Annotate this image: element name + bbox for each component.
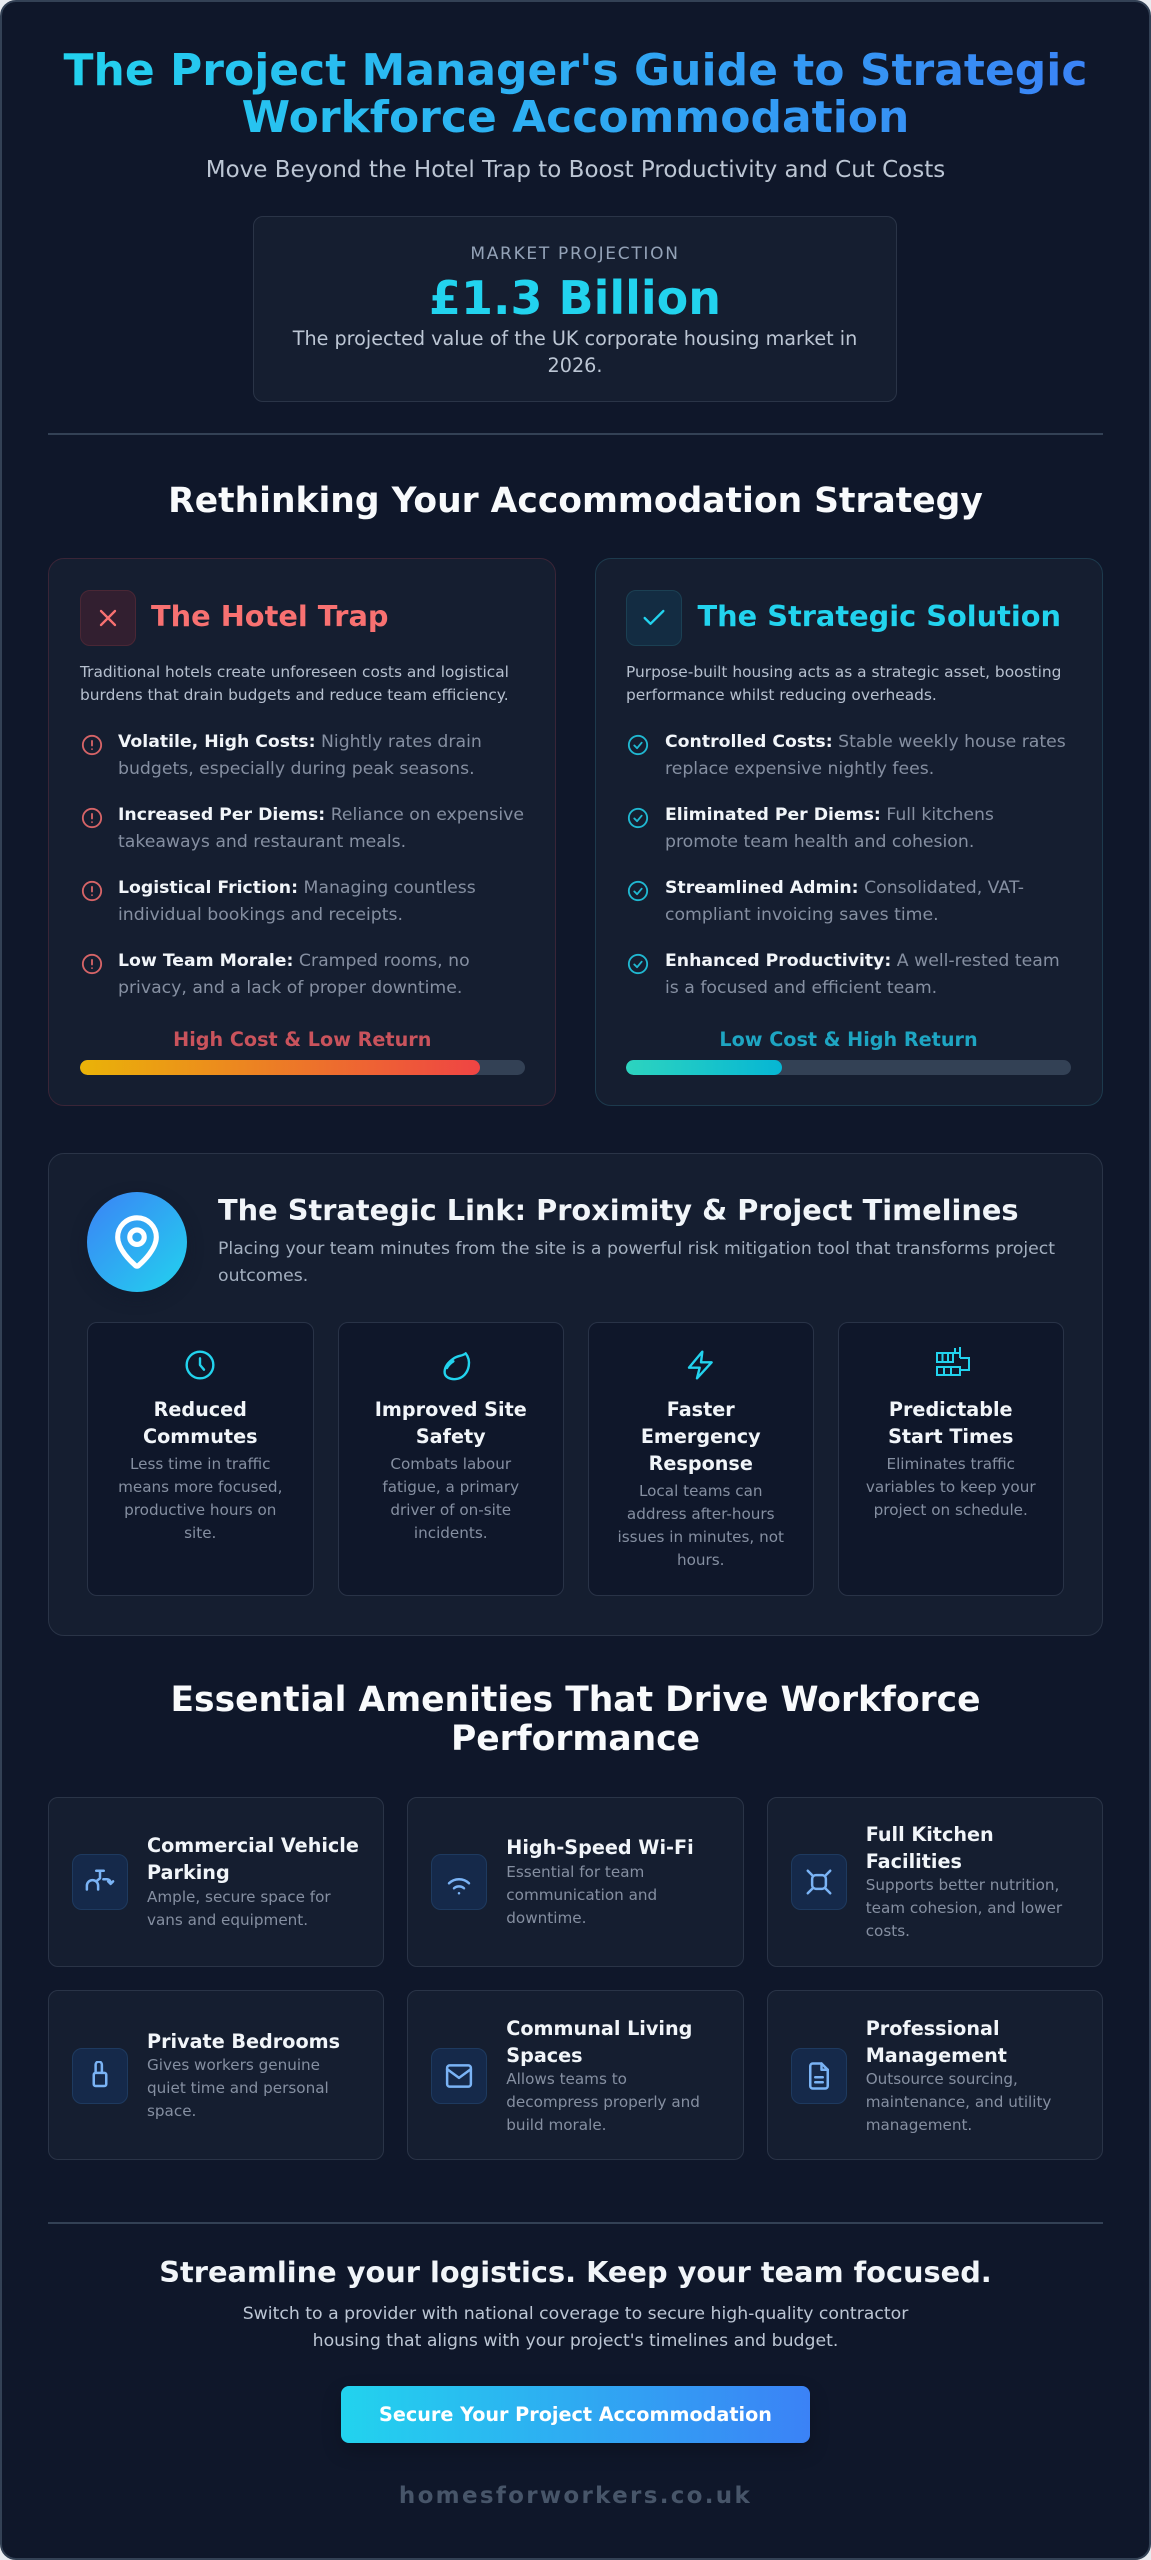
icon: check circle bbox=[628, 734, 648, 756]
card title: Commercial Vehicle bbox=[147, 1834, 359, 1857]
card title: Faster bbox=[667, 1398, 735, 1420]
item: eliminated per diems: promote team health and cohesion. bbox=[665, 832, 974, 852]
card title: High-Speed Wi-Fi bbox=[506, 1836, 694, 1859]
item: streamlined admin: Streamlined Admin: Consolidated, VAT- bbox=[665, 878, 1024, 898]
heading: essential amenities bbox=[170, 1680, 981, 1758]
item: increased per diems bbox=[118, 805, 524, 852]
card text: communication and bbox=[506, 1886, 657, 1904]
item: enhanced productivity bbox=[665, 951, 1060, 998]
card text bbox=[866, 1455, 1036, 1519]
icon: parking bbox=[72, 1854, 128, 1910]
card title: Reduced bbox=[154, 1398, 247, 1420]
card text: downtime. bbox=[506, 1908, 586, 1926]
card text: driver of on-site bbox=[390, 1501, 511, 1519]
panel heading: The Strategic Solution bbox=[698, 599, 1061, 633]
section description: outcomes. bbox=[218, 1266, 308, 1286]
item: streamlined admin bbox=[665, 878, 1024, 925]
card text: Outsource sourcing, bbox=[866, 2070, 1018, 2088]
card title bbox=[888, 1398, 1013, 1448]
card text: Allows teams to bbox=[506, 2070, 627, 2088]
card: faster emergency response bbox=[588, 1322, 814, 1596]
card title: Start Times bbox=[888, 1424, 1013, 1448]
card title: Private Bedrooms bbox=[147, 2030, 340, 2053]
item: low team morale: privacy, and a lack of proper downtime. bbox=[118, 978, 462, 998]
icon: check circle bbox=[628, 880, 648, 902]
item: volatile high costs: budgets, especially during peak seasons. bbox=[118, 759, 475, 779]
card text: team cohesion, and lower bbox=[866, 1899, 1062, 1917]
stat label: MARKET PROJECTION bbox=[470, 244, 680, 264]
icon: alert bbox=[82, 954, 102, 974]
panel: the strategic link bbox=[48, 1153, 1103, 1636]
card title: Professional bbox=[866, 2017, 1000, 2040]
icon: map pin bbox=[87, 1192, 187, 1292]
card text: build morale. bbox=[506, 2116, 606, 2134]
card title: Response bbox=[649, 1452, 753, 1474]
card text: maintenance, and utility bbox=[866, 2092, 1051, 2110]
item: streamlined admin: compliant invoicing saves time. bbox=[665, 905, 939, 925]
card title bbox=[506, 2017, 692, 2067]
panel: market projection stat bbox=[253, 216, 897, 402]
icon: schedule blocks bbox=[936, 1347, 970, 1376]
item: volatile high costs bbox=[118, 732, 482, 779]
card text: Local teams can bbox=[639, 1482, 763, 1500]
item: eliminated per diems: Eliminated Per Diems: Full kitchens bbox=[665, 805, 994, 825]
footer text bbox=[48, 2300, 1103, 2354]
card text bbox=[118, 1455, 282, 1542]
brand: homesforworkers.co.uk bbox=[399, 2483, 752, 2509]
card text: vans and equipment. bbox=[147, 1910, 308, 1928]
meter: high cost bar bbox=[80, 1060, 524, 1074]
card text: fatigue, a primary bbox=[382, 1478, 519, 1496]
card text: means more focused, bbox=[118, 1478, 282, 1496]
card text bbox=[866, 1876, 1062, 1940]
footer text: housing that aligns with your project's timelines and budget. bbox=[313, 2330, 838, 2350]
card title: Improved Site bbox=[375, 1398, 527, 1420]
card text: costs. bbox=[866, 1922, 910, 1940]
panel intro: Purpose-built housing acts as a strategic asset, boosting bbox=[626, 662, 1061, 680]
icon: bedroom bbox=[72, 2048, 128, 2104]
icon: check circle bbox=[628, 954, 648, 974]
heading: essential amenities: Essential Amenities That Drive Workforce bbox=[170, 1680, 981, 1720]
card text: Combats labour bbox=[390, 1455, 511, 1473]
card title bbox=[641, 1398, 761, 1474]
icon: clock bbox=[186, 1350, 214, 1380]
button: call to action bbox=[341, 2386, 810, 2443]
meter: low cost bar bbox=[626, 1060, 1071, 1074]
card text bbox=[506, 1862, 657, 1926]
card: private bedrooms bbox=[48, 1990, 384, 2160]
card text: incidents. bbox=[414, 1524, 488, 1542]
card text: management. bbox=[866, 2116, 972, 2134]
card text: issues in minutes, not bbox=[618, 1528, 784, 1546]
stat description: The projected value of the UK corporate housing market in bbox=[293, 327, 857, 350]
card text: Ample, secure space for bbox=[147, 1888, 331, 1906]
title: The Project Manager's Guide to Strategic bbox=[64, 45, 1087, 96]
card title: Commutes bbox=[143, 1424, 258, 1448]
title: Workforce Accommodation bbox=[242, 92, 909, 142]
heading: rethinking strategy: Rethinking Your Accommodation Strategy bbox=[168, 481, 983, 521]
item: volatile high costs: Volatile, High Costs: Nightly rates drain bbox=[118, 732, 482, 752]
card text: site. bbox=[184, 1524, 216, 1542]
card text: Less time in traffic bbox=[130, 1455, 271, 1473]
card text: Eliminates traffic bbox=[886, 1455, 1015, 1473]
card text: quiet time and personal bbox=[147, 2079, 329, 2097]
card: full kitchen facilities bbox=[767, 1797, 1103, 1967]
panel intro bbox=[80, 662, 509, 704]
card: reduced commutes bbox=[87, 1322, 314, 1596]
card text: Gives workers genuine bbox=[147, 2056, 320, 2074]
icon: wifi bbox=[431, 1854, 487, 1910]
card text: address after-hours bbox=[627, 1505, 775, 1523]
icon: leaf bbox=[443, 1352, 470, 1380]
footer heading: Streamline your logistics. Keep your team focused. bbox=[159, 2255, 992, 2289]
meter label: High Cost & Low Return bbox=[173, 1028, 431, 1051]
subtitle: Move Beyond the Hotel Trap to Boost Productivity and Cut Costs bbox=[206, 157, 945, 183]
icon: x bbox=[80, 590, 136, 646]
item: logistical friction: Logistical Friction: Managing countless bbox=[118, 878, 476, 898]
icon: check circle bbox=[628, 808, 648, 828]
card text bbox=[147, 1888, 331, 1928]
item: enhanced productivity: is a focused and efficient team. bbox=[665, 978, 937, 998]
card title bbox=[375, 1398, 527, 1448]
card text bbox=[382, 1455, 519, 1542]
card: communal living spaces bbox=[407, 1990, 744, 2160]
icon: document bbox=[791, 2048, 847, 2104]
icon: alert bbox=[82, 808, 102, 828]
card text: hours. bbox=[677, 1551, 725, 1569]
item: logistical friction bbox=[118, 878, 476, 925]
item: increased per diems: takeaways and restaurant meals. bbox=[118, 832, 406, 852]
button: call to action: Secure Your Project Accommodation bbox=[379, 2403, 772, 2426]
stat description bbox=[292, 327, 857, 377]
card text bbox=[866, 2068, 1051, 2136]
icon: check bbox=[626, 590, 682, 646]
title bbox=[48, 48, 1103, 141]
card text: variables to keep your bbox=[866, 1478, 1036, 1496]
card: high-speed wi-fi bbox=[407, 1797, 744, 1967]
icon: kitchen bbox=[791, 1854, 847, 1910]
card text: Supports better nutrition, bbox=[866, 1876, 1059, 1894]
panel intro bbox=[626, 662, 1061, 704]
card title bbox=[143, 1398, 258, 1448]
heading: essential amenities: Performance bbox=[451, 1718, 700, 1758]
stat description: 2026. bbox=[548, 354, 602, 377]
icon: alert bbox=[82, 734, 102, 756]
card title: Predictable bbox=[889, 1398, 1013, 1420]
card title: Facilities bbox=[866, 1850, 962, 1872]
icon: lightning bbox=[688, 1350, 713, 1380]
stat value: £1.3 Billion bbox=[429, 271, 721, 325]
card: professional management bbox=[767, 1990, 1103, 2160]
card text bbox=[147, 2056, 329, 2120]
panel: the hotel trap bbox=[48, 558, 556, 1106]
card title: Spaces bbox=[506, 2044, 583, 2067]
card title: Safety bbox=[416, 1424, 486, 1448]
card text: Essential for team bbox=[506, 1862, 644, 1880]
item: controlled costs bbox=[665, 732, 1066, 779]
card title: Management bbox=[866, 2044, 1007, 2067]
section description bbox=[218, 1238, 1055, 1286]
item: logistical friction: individual bookings and receipts. bbox=[118, 905, 403, 925]
card text: space. bbox=[147, 2102, 196, 2120]
card title bbox=[147, 1834, 359, 1884]
card text bbox=[506, 2068, 700, 2136]
item: enhanced productivity: Enhanced Productivity: A well-rested team bbox=[665, 951, 1060, 971]
card text bbox=[618, 1482, 784, 1569]
panel intro: Traditional hotels create unforeseen costs and logistical bbox=[80, 662, 509, 680]
icon: mail bbox=[431, 2048, 487, 2104]
icon: alert bbox=[82, 880, 102, 902]
card text: decompress properly and bbox=[506, 2092, 700, 2110]
card: improved site safety bbox=[338, 1322, 564, 1596]
meter label: Low Cost & High Return bbox=[719, 1028, 978, 1051]
item: low team morale: Low Team Morale: Cramped rooms, no bbox=[118, 951, 470, 971]
card title: Communal Living bbox=[506, 2017, 692, 2040]
item: controlled costs: Controlled Costs: Stable weekly house rates bbox=[665, 732, 1066, 752]
footer text: Switch to a provider with national coverage to secure high-quality contractor bbox=[243, 2304, 908, 2324]
card title bbox=[866, 1822, 994, 1872]
panel: the strategic solution bbox=[595, 558, 1103, 1106]
section description: Placing your team minutes from the site is a powerful risk mitigation tool that transforms project bbox=[218, 1238, 1055, 1258]
card title: Parking bbox=[147, 1861, 230, 1884]
item: increased per diems: Increased Per Diems: Reliance on expensive bbox=[118, 805, 524, 825]
card title: Emergency bbox=[641, 1424, 761, 1448]
panel heading: The Hotel Trap bbox=[151, 599, 389, 633]
item: low team morale bbox=[118, 951, 470, 998]
card title: Full Kitchen bbox=[866, 1822, 994, 1846]
section heading: The Strategic Link: Proximity & Project Timelines bbox=[218, 1193, 1019, 1227]
card title bbox=[866, 2015, 1007, 2069]
card: predictable start times bbox=[838, 1322, 1064, 1596]
card: commercial vehicle parking bbox=[48, 1797, 384, 1967]
card text: productive hours on bbox=[124, 1501, 276, 1519]
item: controlled costs: replace expensive nightly fees. bbox=[665, 759, 934, 779]
panel intro: burdens that drain budgets and reduce team efficiency. bbox=[80, 686, 509, 704]
panel intro: performance whilst reducing overheads. bbox=[626, 686, 937, 704]
card text: project on schedule. bbox=[874, 1501, 1028, 1519]
item: eliminated per diems bbox=[665, 805, 994, 852]
